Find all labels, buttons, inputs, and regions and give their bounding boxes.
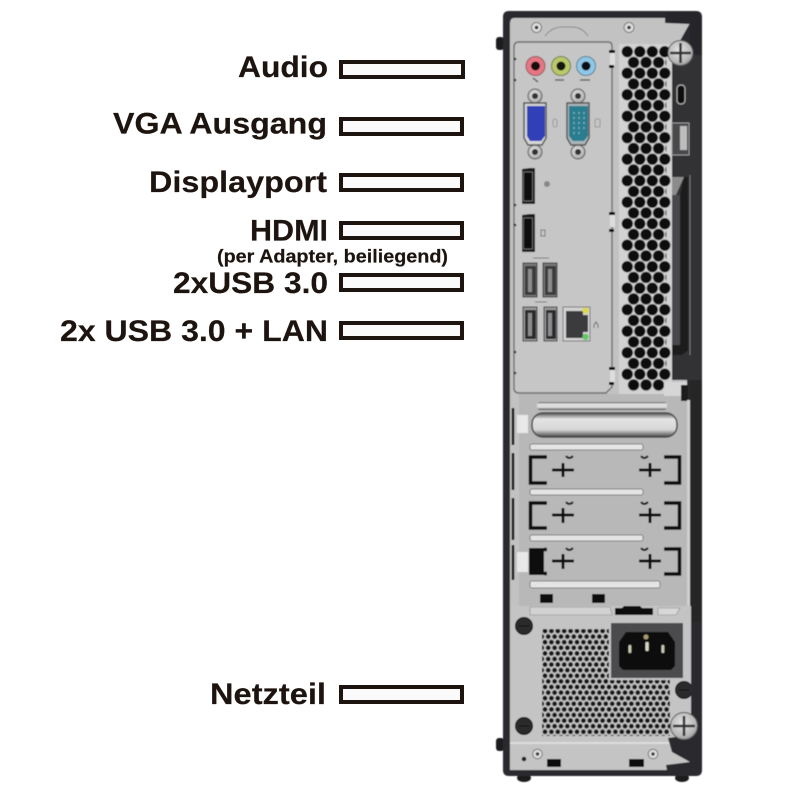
serial port	[567, 89, 600, 159]
label: 2x USB 3.0 + LAN: 2x USB 3.0 + LAN	[60, 315, 328, 348]
label: VGA Ausgang: VGA Ausgang	[113, 108, 327, 140]
lower USB ports	[523, 302, 557, 341]
expansion slot area	[513, 380, 702, 622]
silver back plate	[510, 18, 691, 770]
label: Displayport: Displayport	[149, 166, 327, 199]
label: 2xUSB 3.0: 2xUSB 3.0	[173, 267, 328, 300]
label: Audio	[238, 51, 463, 84]
bottom right black corner	[666, 676, 702, 776]
square cutouts	[540, 594, 605, 603]
top thumb screw	[668, 40, 693, 66]
power socket	[611, 623, 683, 678]
label: 2x USB 3.0 + LAN	[60, 315, 462, 348]
DisplayPort connector	[522, 168, 550, 204]
left and right case feet and knobs	[496, 37, 689, 782]
hexagonal vent mesh	[619, 44, 672, 394]
black case body	[503, 11, 702, 776]
upper USB ports	[523, 258, 557, 297]
power supply panel	[510, 606, 691, 770]
label: VGA Ausgang	[113, 108, 462, 140]
label: Displayport	[149, 166, 462, 199]
label: Netzteil: Netzteil	[210, 678, 326, 711]
top mounting screws	[532, 22, 634, 36]
slot brackets and plus marks, row 3	[529, 548, 680, 575]
note: per Adapter: (per Adapter, beiliegend)	[217, 246, 448, 266]
raised top bars	[532, 402, 677, 437]
HDMI adapter connector	[522, 214, 545, 252]
label: Audio: Audio	[238, 51, 328, 84]
audio jacks	[526, 56, 596, 82]
label: 2xUSB 3.0	[173, 267, 462, 300]
bottom cutouts and rivets	[522, 749, 658, 767]
label: HDMI: HDMI	[250, 214, 328, 248]
slot cover strips	[530, 444, 660, 588]
black case screws	[516, 618, 692, 734]
top black corner highlight	[665, 12, 702, 60]
slot brackets and plus marks, row 1	[530, 456, 680, 483]
VGA port	[524, 89, 557, 159]
slot brackets and plus marks, row 2	[530, 502, 680, 528]
right side black column with lock and handle	[672, 55, 702, 380]
LAN port	[563, 307, 598, 341]
perforated PSU vent	[542, 629, 670, 736]
PC rear panel photo	[496, 11, 702, 782]
label: Netzteil	[210, 678, 462, 711]
I/O shield	[514, 42, 615, 393]
bottom thumb screw	[670, 712, 698, 740]
label: HDMI	[250, 214, 462, 248]
